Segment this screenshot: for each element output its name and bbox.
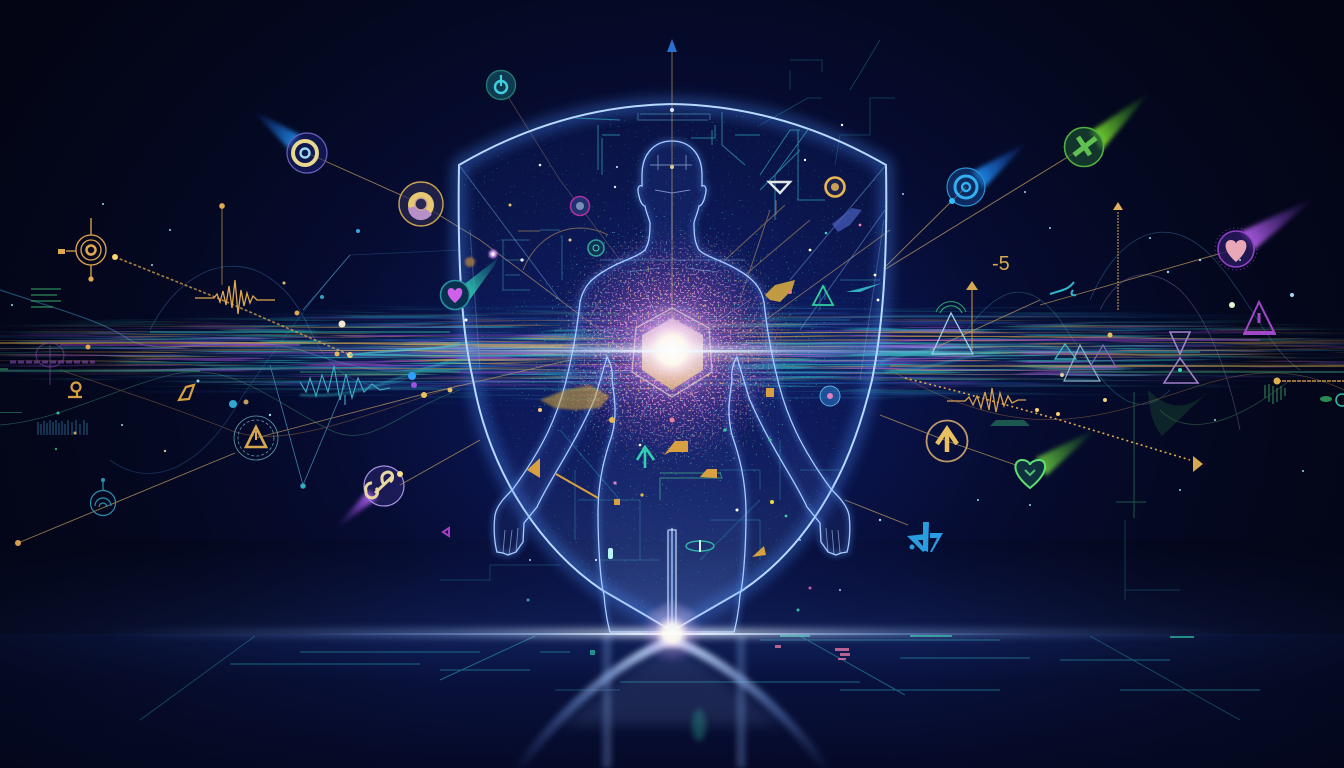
icon: upward arrow in circle <box>926 420 968 462</box>
icon: small disc glyph <box>686 540 714 552</box>
icon: purple heart with comet tail <box>1215 197 1316 270</box>
scattered particles outside shield <box>11 191 1304 612</box>
icon: gold arrow small <box>966 281 978 350</box>
central vertical beam and top arrow <box>667 39 677 350</box>
icon: teal triangle <box>813 286 833 305</box>
horizontal light flare <box>130 346 1214 353</box>
gold shard left <box>540 385 610 410</box>
text glyph: minus five: -5 <box>992 253 1010 275</box>
floor haze above horizon <box>0 540 1344 635</box>
horizon glow and shield tip flare <box>100 600 1244 665</box>
icon: large white triangle with green arcs <box>932 302 973 354</box>
blue shard <box>832 208 862 232</box>
figure body outline <box>494 141 850 632</box>
icon: teal power symbol <box>486 70 516 100</box>
icon: hourglass triangles <box>1164 332 1198 383</box>
gold dash line right with teal ring <box>1265 378 1344 406</box>
icon: blue spiral orb with comet tail <box>947 142 1028 206</box>
icons: triangle cluster <box>1055 344 1116 381</box>
icon: blue angular glyph <box>907 522 943 552</box>
icon: faint purple node <box>10 343 95 385</box>
hexagon core <box>620 298 724 402</box>
icon: triangle in circle <box>234 416 278 460</box>
thin circuit traces behind shield <box>440 40 1180 600</box>
horizontal energy band <box>0 292 1344 412</box>
chart: blue waveform left <box>300 366 390 405</box>
icon: inverted triangle <box>769 182 790 193</box>
icon: gold gear ring <box>826 178 844 196</box>
icon: purple warning triangle <box>1243 302 1276 334</box>
figure: human silhouette <box>494 141 850 632</box>
icon: blue ring <box>90 478 116 516</box>
icon: gold ring <box>399 182 443 226</box>
icon: small glyphs left <box>68 382 194 400</box>
icon: cyan capsule <box>608 548 613 559</box>
chest nebula <box>460 110 885 610</box>
curved signal arcs right <box>890 232 1344 430</box>
gold shard <box>765 280 795 302</box>
chart: gold waveform left <box>195 204 275 314</box>
icon: blue orb <box>820 386 840 406</box>
long connector lines <box>18 147 1236 543</box>
icon: teal ring <box>588 240 604 256</box>
icons inside shield <box>440 124 882 561</box>
icon: triangle node with lines <box>270 255 350 488</box>
panel: reflective floor <box>0 540 1344 768</box>
icon: chain link orb with comet tail <box>334 466 404 530</box>
figure glow <box>494 141 850 632</box>
icon: green orb with comet tail <box>1064 92 1150 166</box>
icon: magenta ring <box>570 196 590 216</box>
panel: shield <box>459 104 886 631</box>
icon: purple triangle marker <box>443 528 449 536</box>
icon: purple heart with teal trail <box>440 250 498 310</box>
teal trail <box>846 283 882 292</box>
coloured particles inside shield <box>464 124 879 561</box>
chart: gold waveform right <box>947 388 1026 412</box>
gold dotted trace ending in arrow <box>905 378 1203 472</box>
icon: small cyan glyph <box>1050 282 1076 295</box>
figure details: hands, centre line, head circuits <box>503 155 840 630</box>
chart: green hatch wedge <box>990 388 1212 436</box>
endpoint dot <box>15 540 21 546</box>
curved signal arcs left <box>0 250 460 474</box>
icon: gold crosshair <box>58 218 106 281</box>
gold trace from left crosshair <box>112 254 460 358</box>
reflection of shield and figure on the floor <box>520 634 825 768</box>
chart: faint blue bars <box>38 420 87 435</box>
icon: blue comet target <box>252 110 327 173</box>
icon: gold upward arrow with long stem <box>1113 202 1123 310</box>
shield interior facets and circuits <box>459 112 886 560</box>
icon: green cross marker <box>1116 392 1146 518</box>
icon: teal up arrow <box>637 447 654 468</box>
text fragments: green data bars <box>0 288 61 413</box>
icon: green heart with comet tail <box>1015 428 1098 488</box>
gold shards lower <box>527 388 774 557</box>
